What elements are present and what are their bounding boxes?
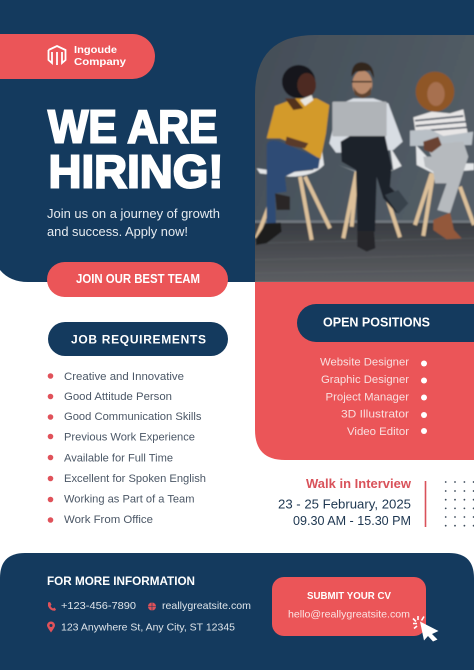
job requirements heading: JOB REQUIREMENTS	[71, 332, 206, 346]
job requirements list: Good Communication Skills	[64, 411, 202, 423]
dot pattern	[445, 481, 474, 527]
job requirements heading	[48, 322, 228, 356]
positions list: Website Designer	[320, 356, 409, 368]
company name: Company	[74, 56, 126, 68]
job requirements list: Available for Full Time	[64, 452, 173, 464]
title: HIRING!	[48, 146, 224, 198]
icon: phone	[48, 602, 56, 611]
submit cv box	[272, 577, 426, 636]
icon: location pin	[47, 622, 55, 632]
button: join our best team: JOIN OUR BEST TEAM	[76, 272, 200, 286]
address: 123 Anywhere St, Any City, ST 12345	[61, 622, 235, 634]
submit cv box: SUBMIT YOUR CV	[307, 590, 391, 602]
phone number: +123-456-7890	[61, 600, 136, 612]
job requirements list: Creative and Innovative	[64, 371, 184, 383]
job requirements list: Excellent for Spoken English	[64, 473, 206, 485]
positions list: Video Editor	[347, 426, 409, 438]
logo pill	[0, 34, 155, 79]
job requirements list: Working as Part of a Team	[64, 494, 194, 506]
positions list	[320, 356, 409, 438]
website: reallygreatsite.com	[162, 600, 251, 612]
positions list: 3D Illustrator	[341, 408, 409, 420]
title: WE ARE	[48, 100, 218, 152]
photo: three candidates waiting	[250, 30, 474, 283]
walk in interview details: 23 - 25 February, 2025	[278, 496, 411, 512]
open positions heading: OPEN POSITIONS	[323, 316, 430, 330]
title	[48, 100, 224, 198]
intro text: Join us on a journey of growth	[47, 206, 220, 221]
positions list: Graphic Designer	[321, 374, 409, 386]
walk in interview details: 09.30 AM - 15.30 PM	[293, 513, 411, 528]
job requirements list: Good Attitude Person	[64, 391, 172, 403]
icon: company logo	[48, 46, 66, 65]
panel: open positions	[255, 282, 474, 460]
job requirements list: Previous Work Experience	[64, 432, 195, 444]
header background panel	[0, 0, 474, 282]
button: join our best team	[47, 262, 228, 297]
position bullets	[421, 360, 427, 434]
positions list: Project Manager	[326, 392, 409, 404]
company name	[74, 44, 126, 68]
job requirements list: Work From Office	[64, 514, 153, 526]
intro text: and success. Apply now!	[47, 224, 188, 239]
job requirements list	[48, 371, 206, 526]
footer heading: FOR MORE INFORMATION	[47, 574, 195, 588]
submit cv box: hello@reallygreatsite.com	[288, 608, 410, 620]
panel: footer	[0, 553, 474, 670]
icon: globe	[148, 602, 156, 610]
walk in interview details	[278, 476, 412, 528]
walk in interview details: Walk in Interview	[306, 476, 412, 491]
open positions heading	[297, 304, 474, 342]
icon: cursor click	[413, 616, 438, 642]
intro text	[47, 206, 220, 239]
company name: Ingoude	[74, 44, 117, 56]
